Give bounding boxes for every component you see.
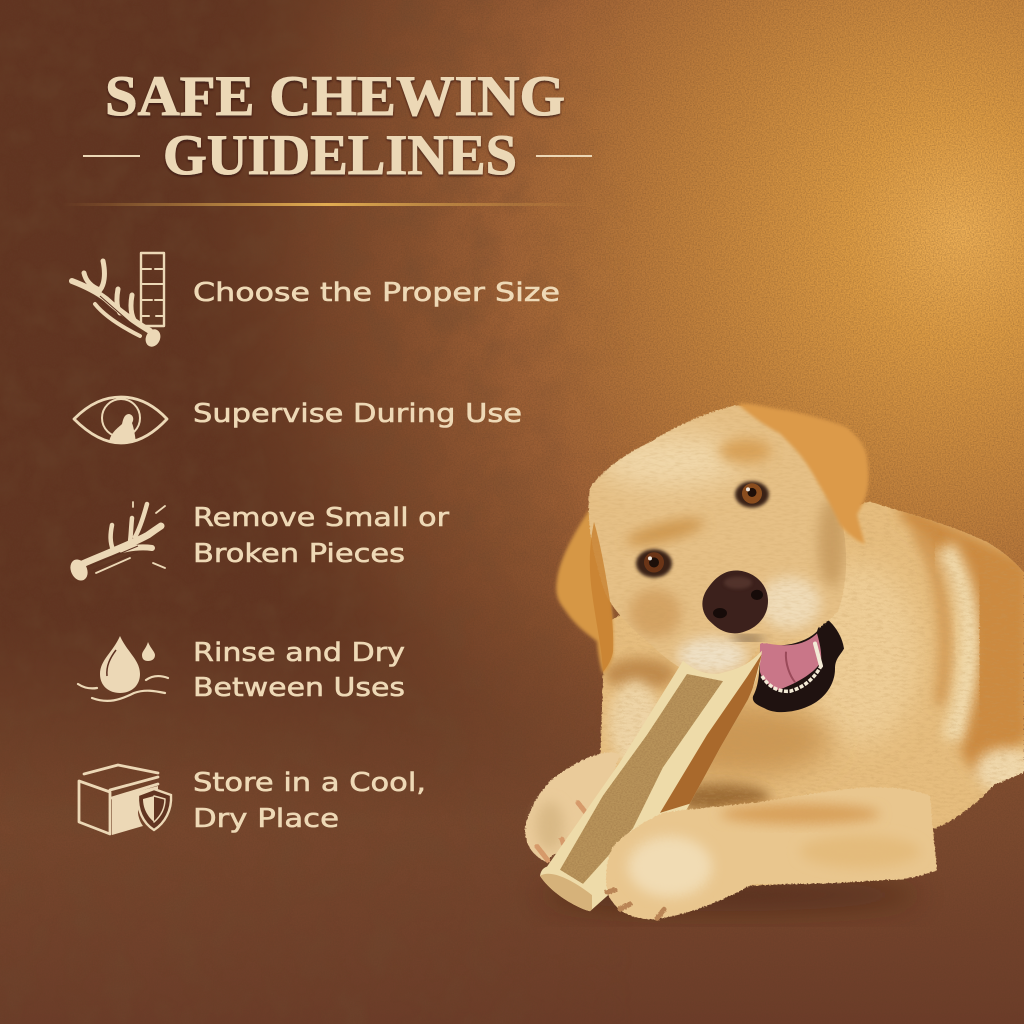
icon: box with shield [79, 765, 171, 835]
item: supervise during use [74, 397, 522, 443]
gold divider [62, 203, 592, 206]
title [105, 65, 565, 187]
item: store in a cool, dry place [79, 765, 426, 835]
antler chew [540, 651, 762, 913]
item: remove small or broken pieces [67, 502, 449, 583]
dog head [585, 400, 855, 684]
dog eyes [636, 481, 769, 578]
label: Rinse and Dry [193, 638, 405, 668]
title: GUIDELINES [163, 124, 517, 187]
dog mouth and tongue [753, 615, 844, 712]
title flanking rule: right [536, 155, 592, 157]
label: Remove Small or [193, 503, 449, 533]
icon: water drops and waves [78, 636, 168, 701]
item: choose the proper size [72, 253, 560, 349]
item: rinse and dry between uses [78, 636, 405, 703]
dog chewing antler [525, 400, 1024, 919]
dog front leg and paw [606, 787, 937, 919]
label [193, 503, 449, 569]
label: Dry Place [193, 804, 339, 834]
dog body [600, 502, 1024, 887]
dog nose [702, 571, 768, 633]
label: Choose the Proper Size [193, 278, 560, 308]
title flanking rule: left [83, 155, 140, 157]
label [193, 638, 405, 703]
dog far paw [525, 752, 620, 862]
label: Broken Pieces [193, 539, 405, 569]
label: Store in a Cool, [193, 768, 426, 798]
icon: antler and ruler [72, 253, 164, 349]
dog left ear [556, 509, 613, 674]
title: SAFE CHEWING [105, 65, 565, 128]
dog right ear [737, 403, 868, 544]
icon: broken antler [67, 502, 165, 583]
dog left ear fold [590, 522, 613, 672]
label [193, 768, 426, 834]
icon: eye with dog [74, 397, 167, 443]
label: Between Uses [193, 673, 405, 703]
label: Supervise During Use [193, 399, 522, 429]
